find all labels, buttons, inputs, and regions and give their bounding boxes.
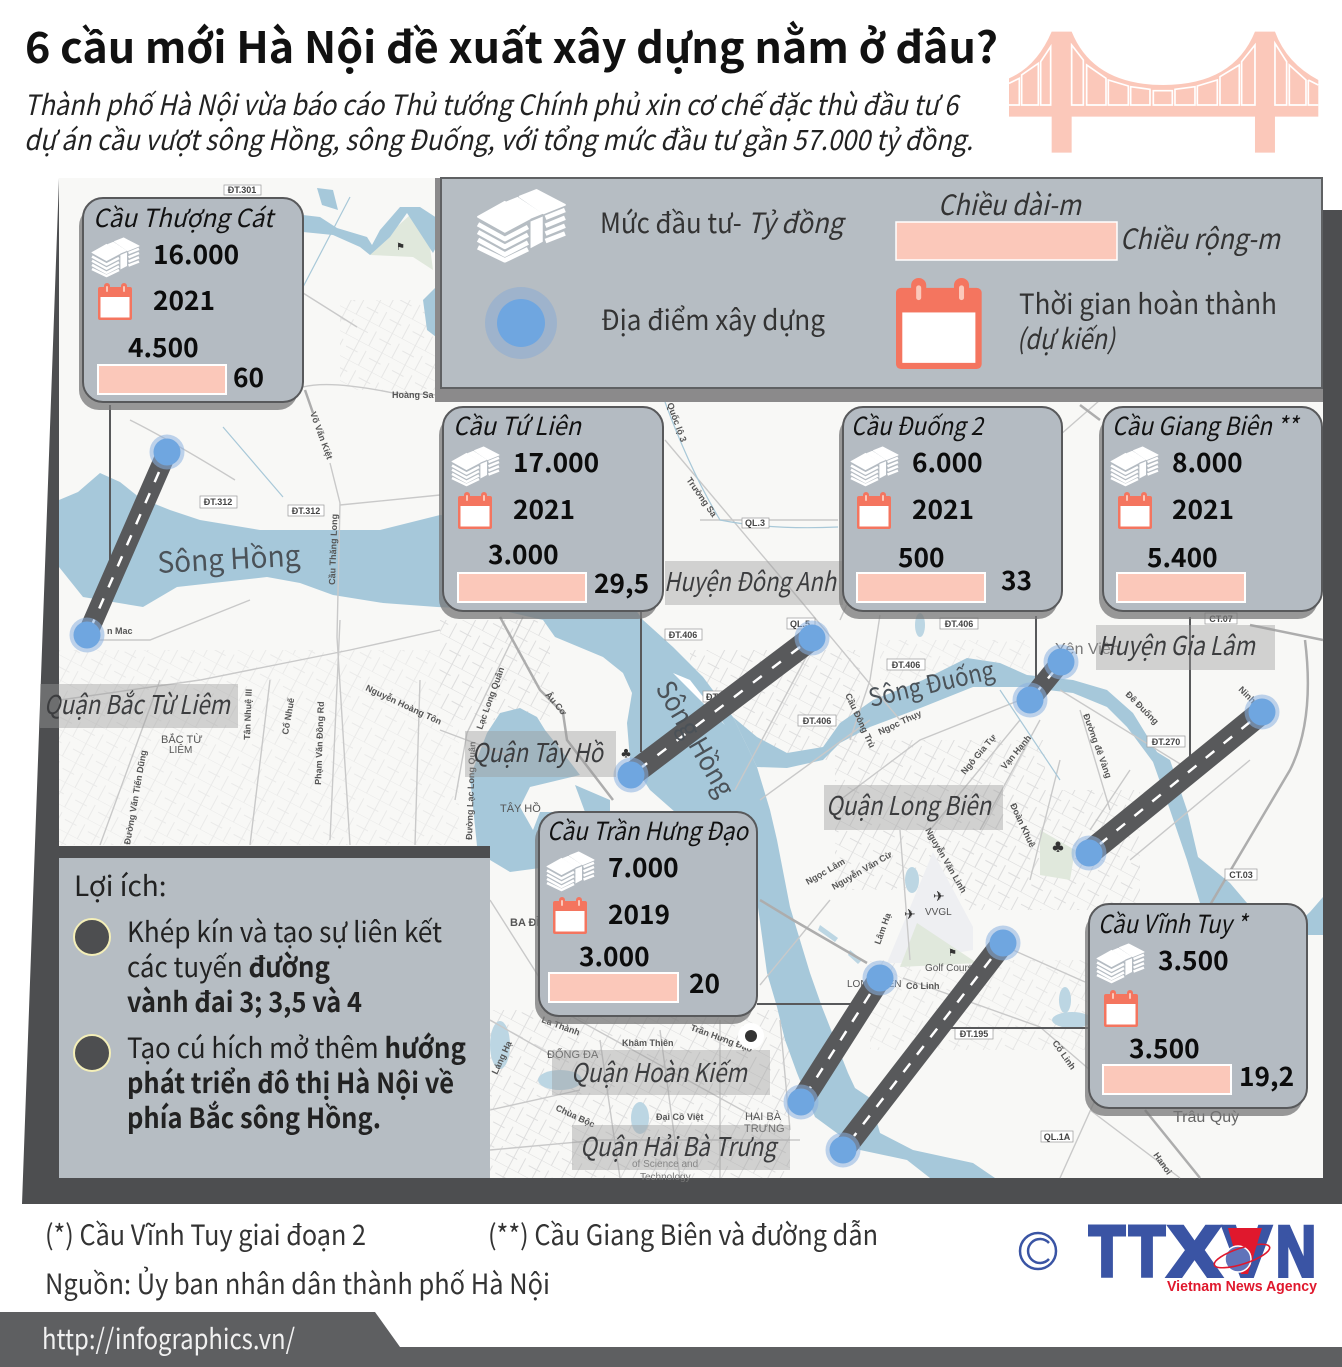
- map place names: Đoàn Khuê: [1008, 802, 1037, 849]
- map place names: Nguyễn Hoàng Tôn: [364, 683, 443, 727]
- map place names: Vạn Hạnh: [999, 733, 1033, 771]
- map place names: La Thành: [540, 1014, 581, 1038]
- district label: Quận Bắc Từ Liêm: Quận Bắc Từ Liêm: [44, 685, 231, 722]
- legend text: length: Chiều dài-m: [938, 184, 1082, 224]
- icon: calendar: [896, 278, 982, 369]
- card: Cầu Vĩnh Tuy: 3.500: [1129, 1027, 1200, 1066]
- map place names: Trần Hưng Đạo: [689, 1022, 754, 1054]
- card: Cầu Giang Biên: [1099, 407, 1322, 619]
- footnote: Giang Biên: (**) Cầu Giang Biên và đường dẫn: [488, 1214, 878, 1254]
- map place names: ĐỐNG ĐA: [547, 1047, 599, 1061]
- map place names: Cầu Đông Trù: [843, 692, 877, 749]
- benefit text 2: [127, 1027, 466, 1137]
- map place names: BẮC TỪ: [161, 733, 203, 746]
- map place names: Âu Cơ: [543, 689, 570, 718]
- map place names: Hanoi: [1151, 1150, 1174, 1177]
- legend text: completion: Thời gian hoàn thành: [1019, 283, 1277, 323]
- legend text: location: Địa điểm xây dựng: [601, 299, 825, 339]
- benefit text 1: vành đai 3; 3,5 và 4: [127, 981, 362, 1021]
- map place names: HAI BÀ: [745, 1110, 782, 1123]
- card: Cầu Giang Biên: 8.000: [1172, 441, 1243, 480]
- map place names: Quốc lộ 5: [546, 391, 587, 401]
- district label: Quận Hoàn Kiếm: Quận Hoàn Kiếm: [571, 1053, 748, 1090]
- district label: Huyện Gia Lâm: Huyện Gia Lâm: [1098, 626, 1256, 663]
- river island: [673, 673, 725, 725]
- benefit text 1: [127, 911, 442, 1021]
- benefit bullet 1: [74, 919, 110, 955]
- road network: [60, 293, 1250, 1178]
- bridge: Cầu Giang Biên: [1072, 694, 1280, 870]
- bottom bar: [0, 1312, 1342, 1367]
- icon: money stack: [478, 190, 565, 260]
- planes and park symbols: ⚑: [396, 238, 405, 253]
- map place names: Trâu Quỳ: [1173, 1109, 1239, 1126]
- map place names: of Science and: [632, 1159, 698, 1170]
- planes and park symbols: ✈: [904, 904, 916, 924]
- bridge: Cầu Vĩnh Tuy: [826, 926, 1020, 1168]
- map background: ĐT.270: [1152, 737, 1180, 747]
- map place names: Trường Sa: [684, 475, 719, 520]
- card: Cầu Đuống 2: Cầu Đuống 2: [851, 407, 985, 443]
- planes and park symbols: [396, 238, 1064, 959]
- location marker: [738, 1023, 764, 1049]
- river label: Sông Hồng (rotated): Sông Hồng: [648, 672, 746, 803]
- card: Cầu Vĩnh Tuy: 3.500: [1158, 939, 1229, 978]
- source: Nguồn: Ủy ban nhân dân thành phố Hà Nội: [45, 1263, 550, 1303]
- map background: ĐT.312: [204, 497, 232, 507]
- card: Cầu Trần Hưng Đạo: Cầu Trần Hưng Đạo: [547, 812, 750, 848]
- subtitle: dự án cầu vượt sông Hồng, sông Đuống, với tổng mức đầu tư gần 57.000 tỷ đồng.: [24, 119, 973, 159]
- card: Cầu Tứ Liên: 2021: [513, 488, 575, 527]
- title: 6 cầu mới Hà Nội đề xuất xây dựng nằm ở đâu?: [25, 14, 998, 76]
- card: Cầu Đuống 2: 2021: [912, 488, 974, 527]
- river label: Sông Đuống: Sông Đuống: [865, 651, 998, 715]
- card: Cầu Trần Hưng Đạo: 3.000: [579, 935, 650, 974]
- logo: TTXVN: [1089, 1213, 1317, 1295]
- card: Cầu Thượng Cát: Cầu Thượng Cát: [93, 199, 276, 235]
- map background: ĐT.312: [292, 506, 320, 516]
- map place names: LONG BIÊN: [847, 977, 901, 990]
- card: Cầu Tứ Liên: Cầu Tứ Liên: [453, 407, 583, 443]
- map place names: Chùa Bộc: [554, 1103, 596, 1130]
- map place names: Cổ Nhuế: [280, 696, 297, 735]
- card: Cầu Trần Hưng Đạo: [535, 812, 757, 1024]
- legend text: investment: Mức đầu tư- Tỷ đồng: [600, 202, 846, 242]
- map place names: Golf Course: [925, 963, 979, 974]
- card: Cầu Thượng Cát: 16.000: [153, 233, 239, 272]
- map place names: Đường đê Vàng: [1081, 712, 1114, 780]
- legend bar: [896, 222, 1117, 260]
- logo: TTXVN: T: [1129, 1213, 1165, 1292]
- map place names: BA ĐÌNH: [510, 916, 555, 929]
- map place names: Technology: [640, 1172, 691, 1183]
- benefit text 2: Tạo cú hích mở thêm hướng: [127, 1027, 466, 1067]
- district label: Quận Tây Hồ: Quận Tây Hồ: [472, 733, 605, 770]
- bridge: Cầu Trần Hưng Đạo: [784, 960, 898, 1120]
- legend text: width: Chiều rộng-m: [1120, 218, 1281, 258]
- card: Cầu Giang Biên: 2021: [1172, 488, 1234, 527]
- map background: QL.1A: [1044, 1132, 1071, 1142]
- map background: ĐT.406: [892, 660, 920, 670]
- card: Cầu Vĩnh Tuy: Cầu Vĩnh Tuy *: [1098, 905, 1250, 941]
- benefit text 1: các tuyến đường: [127, 946, 330, 986]
- card: Cầu Thượng Cát: 4.500: [128, 326, 199, 365]
- card: Cầu Thượng Cát: [79, 198, 303, 410]
- card: Cầu Tứ Liên: 29,5: [594, 562, 649, 601]
- panel: benefits: [59, 846, 490, 1178]
- card: Cầu Đuống 2: 6.000: [912, 441, 983, 480]
- map background: ĐT: [706, 692, 718, 702]
- legend text: completion: [1017, 283, 1277, 358]
- map place names: Cổ Linh: [1050, 1038, 1078, 1072]
- district label: Quận Long Biên: Quận Long Biên: [826, 786, 992, 823]
- map place names: Võ Văn Kiệt: [308, 410, 335, 461]
- map place names: Ninh: [1237, 684, 1258, 706]
- card: Cầu Đuống 2: [839, 407, 1062, 619]
- map background: QL.5: [790, 619, 810, 629]
- footnote: Vĩnh Tuy: (*) Cầu Vĩnh Tuy giai đoạn 2: [45, 1214, 366, 1254]
- map place names: Cô Linh: [906, 981, 940, 991]
- icon: location circle: [485, 287, 557, 359]
- map place names: Đường Lạc Long Quân: [464, 741, 477, 840]
- card: Cầu Tứ Liên: 17.000: [513, 441, 599, 480]
- map place names: Quốc lộ 3: [665, 401, 689, 443]
- map place names: Khâm Thiên: [622, 1038, 674, 1048]
- parks, golf course and airport: [887, 852, 973, 963]
- card: Cầu Vĩnh Tuy: 19,2: [1239, 1055, 1294, 1094]
- logo: TTXVN: T: [1089, 1213, 1125, 1292]
- subtitle: Thành phố Hà Nội vừa báo cáo Thủ tướng Chính phủ xin cơ chế đặc thù đầu tư 6: [24, 84, 961, 124]
- card: Cầu Tứ Liên: [439, 407, 663, 619]
- map place names: Đường Văn Tiến Dũng: [122, 749, 149, 845]
- rivers: [59, 188, 1323, 1178]
- map place names: Tân Nhuệ III: [242, 689, 254, 740]
- icon: suspension bridge: [1009, 32, 1318, 153]
- small lakes: [490, 613, 1092, 1134]
- card: Cầu Trần Hưng Đạo: 2019: [608, 893, 670, 932]
- logo: TTXVN: V: [1223, 1213, 1271, 1292]
- map place names: Nguyễn Văn Linh: [923, 826, 969, 895]
- planes and park symbols: ✈: [933, 886, 945, 906]
- card: Cầu Vĩnh Tuy: [1085, 904, 1307, 1116]
- map background: ĐT.301: [228, 185, 256, 195]
- planes and park symbols: ⚑: [948, 944, 957, 959]
- card: Cầu Đuống 2: 33: [1001, 559, 1032, 598]
- card: Cầu Giang Biên: Cầu Giang Biên **: [1112, 407, 1301, 443]
- map place names: Láng Hạ: [490, 1039, 514, 1076]
- district label: Quận Hải Bà Trưng: Quận Hải Bà Trưng: [580, 1127, 779, 1164]
- dark frame: [22, 178, 1342, 1204]
- map place names: Yên Viên: [1055, 641, 1120, 658]
- card: Cầu Thượng Cát: 2021: [153, 279, 215, 318]
- card: Cầu Trần Hưng Đạo: 20: [689, 962, 720, 1001]
- map place names: Đê Đuống: [1124, 689, 1161, 726]
- bridge: Cầu Tứ Liên: [614, 620, 830, 792]
- card: Cầu Trần Hưng Đạo: 7.000: [608, 846, 679, 885]
- map place names: VVGL: [925, 907, 952, 918]
- map place names: Ngọc Lâm: [804, 856, 847, 887]
- panel: legend: [435, 178, 1323, 402]
- benefit text 2: phía Bắc sông Hồng.: [127, 1097, 381, 1137]
- logo: TTXVN: N: [1276, 1213, 1316, 1292]
- map place names: Ngô Gia Tự: [959, 732, 998, 776]
- road shields: [200, 185, 1257, 1142]
- benefit text 2: phát triển đô thị Hà Nội về: [127, 1062, 454, 1102]
- planes and park symbols: ♣: [621, 745, 631, 760]
- logo: TTXVN: Vietnam News Agency: [1167, 1279, 1317, 1295]
- planes and park symbols: ♣: [1052, 838, 1064, 855]
- street texture: [59, 300, 1140, 1178]
- map place names: Ngọc Thụy: [877, 708, 923, 737]
- map place names: TRƯNG: [744, 1123, 785, 1135]
- map place names: Hoàng Sa: [392, 390, 435, 400]
- url: http://infographics.vn/: [42, 1318, 295, 1358]
- map background: ĐT.195: [960, 1029, 988, 1039]
- benefit text 1: Khép kín và tạo sự liên kết: [127, 911, 442, 951]
- subtitle: [24, 84, 973, 159]
- bridge: Cầu Đuống 2: [1012, 644, 1078, 718]
- map background: [59, 178, 1323, 1183]
- card: Cầu Đuống 2: 500: [898, 536, 945, 575]
- map background: ĐT.406: [669, 630, 697, 640]
- map place names: TÂY HỒ: [500, 802, 541, 815]
- map background: CT.03: [1229, 870, 1253, 880]
- benefits heading: Lợi ích:: [74, 865, 167, 905]
- district label: Huyện Đông Anh: Huyện Đông Anh: [664, 562, 837, 599]
- river label: Sông Hồng: Sông Hồng: [156, 533, 301, 582]
- benefit bullet 2: [74, 1035, 110, 1071]
- card: Cầu Thượng Cát: 60: [233, 356, 264, 395]
- callout leader lines: [110, 405, 1190, 1028]
- map place names: LIÊM: [169, 743, 192, 756]
- map place names: Lạc Long Quân: [474, 666, 506, 731]
- map place names: Đại Cồ Việt: [656, 1112, 703, 1122]
- bridge: Cầu Thượng Cát: [70, 434, 184, 652]
- card: Cầu Giang Biên: 5.400: [1147, 536, 1218, 575]
- map place names: n Mac: [107, 626, 133, 636]
- map background: ĐT.406: [803, 716, 831, 726]
- logo: TTXVN: X: [1168, 1213, 1221, 1292]
- map place names: Lâm Hạ: [872, 911, 893, 946]
- card: Cầu Tứ Liên: 3.000: [488, 533, 559, 572]
- legend text: completion: (dự kiến): [1017, 318, 1116, 358]
- icon: copyright: [1020, 1233, 1056, 1269]
- map place names: Nguyễn Văn Cừ: [830, 849, 894, 892]
- map place names: Cầu Thăng Long: [327, 514, 339, 585]
- map place names: Phạm Văn Đồng Rd: [313, 701, 326, 785]
- map place names: [107, 390, 1258, 1183]
- map background: QL.3: [745, 518, 765, 528]
- map background: ĐT.406: [945, 619, 973, 629]
- map background: CT.07: [1209, 614, 1233, 624]
